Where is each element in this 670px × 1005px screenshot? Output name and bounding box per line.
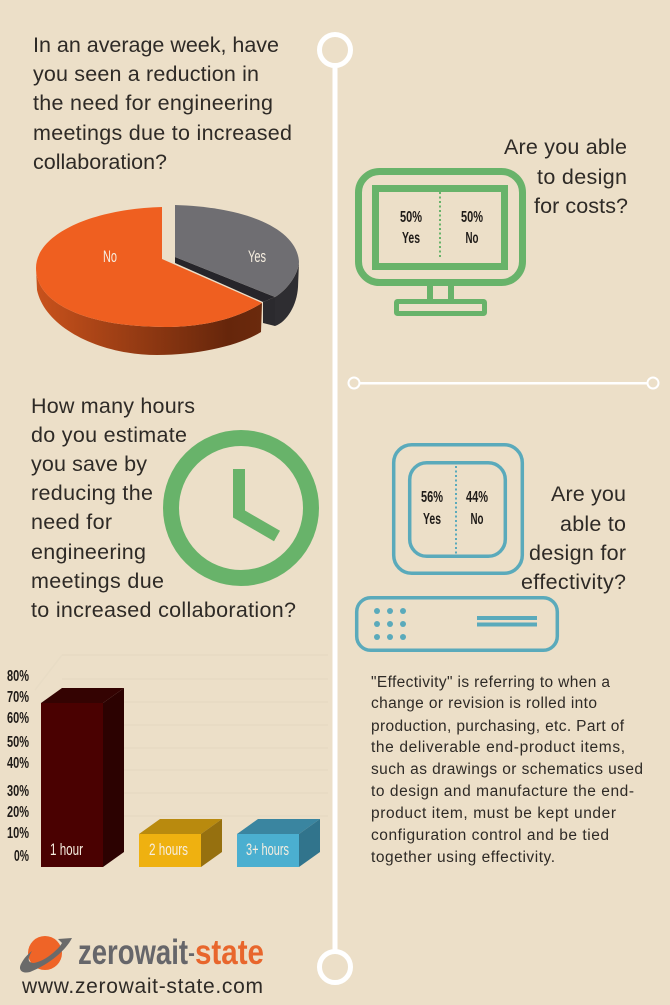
stat: 44% no: 44% <box>466 489 488 506</box>
pie chart <box>36 205 299 355</box>
effectivity explanation: change or revision is rolled into <box>371 695 597 712</box>
question: hours saved: engineering <box>31 540 146 564</box>
stat: 56% yes: 56% <box>421 489 443 506</box>
timeline <box>320 34 658 982</box>
stat: 50% yes: 50% <box>400 209 422 226</box>
y axis labels: 70% <box>7 689 29 706</box>
icon: planet <box>20 936 72 973</box>
effectivity explanation: "Effectivity" is referring to when a <box>371 674 610 691</box>
question: design for effectivity: design for <box>529 541 626 565</box>
logo: zerowait-state: - <box>188 933 195 972</box>
stat: 50% no <box>461 209 483 247</box>
logo: zerowait-state: state <box>195 933 264 972</box>
question: meetings reduction: the need for engineering <box>33 91 273 115</box>
website url: www.zerowait-state.com <box>21 975 263 998</box>
question: meetings reduction: you seen a reduction in <box>33 62 259 86</box>
question: meetings reduction: meetings due to increased <box>33 121 292 145</box>
effectivity explanation: production, purchasing, etc. Part of <box>371 718 625 735</box>
question: design for effectivity: able to <box>560 512 626 536</box>
question: design for effectivity: Are you <box>551 482 626 506</box>
stat: 50% no: No <box>466 230 479 247</box>
bar chart <box>7 655 328 867</box>
stat: 56% yes <box>421 489 443 528</box>
y axis labels: 20% <box>7 804 29 821</box>
y axis labels: 0% <box>14 848 29 865</box>
y axis labels: 50% <box>7 734 29 751</box>
bar: 3+ hours: 3+ hours <box>246 841 289 859</box>
y axis labels: 40% <box>7 755 29 772</box>
effectivity explanation: configuration control and be tied <box>371 827 609 844</box>
logo: zerowait-state: zerowait <box>78 933 188 972</box>
y axis labels: 30% <box>7 783 29 800</box>
bar: 1 hour: 1 hour <box>50 841 83 859</box>
question: design for costs: to design <box>537 165 627 189</box>
question: design for costs <box>504 135 628 218</box>
bar: 2 hours: 2 hours <box>149 841 188 859</box>
question: hours saved <box>31 394 296 622</box>
label: No: No <box>103 248 117 266</box>
stat: 50% yes <box>400 209 422 247</box>
bar: 3+ hours <box>237 819 320 867</box>
effectivity explanation: together using effectivity. <box>371 849 555 866</box>
question: hours saved: meetings due <box>31 569 164 593</box>
effectivity explanation <box>371 674 643 866</box>
question: design for costs: Are you able <box>504 135 627 159</box>
question: hours saved: do you estimate <box>31 423 187 447</box>
stat: 50% no: 50% <box>461 209 483 226</box>
effectivity explanation: the deliverable end-product items, <box>371 739 625 756</box>
stat: 44% no <box>466 489 488 528</box>
logo: zerowait-state <box>20 933 264 973</box>
bar: 2 hours <box>139 819 222 867</box>
effectivity explanation: such as drawings or schematics used <box>371 761 643 778</box>
stat: 44% no: No <box>470 511 484 528</box>
question: hours saved: you save by <box>31 452 147 476</box>
stat: 50% yes: Yes <box>402 230 420 247</box>
question: meetings reduction: collaboration? <box>33 150 167 174</box>
question: hours saved: need for <box>31 510 112 534</box>
bar: 1 hour <box>41 688 124 867</box>
icon: green monitor <box>358 172 522 314</box>
effectivity explanation: product item, must be kept under <box>371 805 616 822</box>
question: hours saved: How many hours <box>31 394 195 418</box>
question: meetings reduction: In an average week, have <box>33 33 279 57</box>
y axis labels: 10% <box>7 825 29 842</box>
question: meetings reduction <box>33 33 292 174</box>
label: Yes: Yes <box>248 248 266 266</box>
question: design for costs: for costs? <box>534 194 628 218</box>
question: hours saved: to increased collaboration? <box>31 598 296 622</box>
question: design for effectivity <box>521 482 626 594</box>
question: design for effectivity: effectivity? <box>521 570 626 594</box>
y axis labels: 60% <box>7 710 29 727</box>
effectivity explanation: to design and manufacture the end- <box>371 783 634 800</box>
question: hours saved: reducing the <box>31 481 153 505</box>
icon: clock <box>171 438 311 578</box>
icon: blue computer <box>357 445 557 650</box>
y axis labels: 80% <box>7 668 29 685</box>
y axis labels <box>7 668 29 865</box>
stat: 56% yes: Yes <box>423 511 441 528</box>
